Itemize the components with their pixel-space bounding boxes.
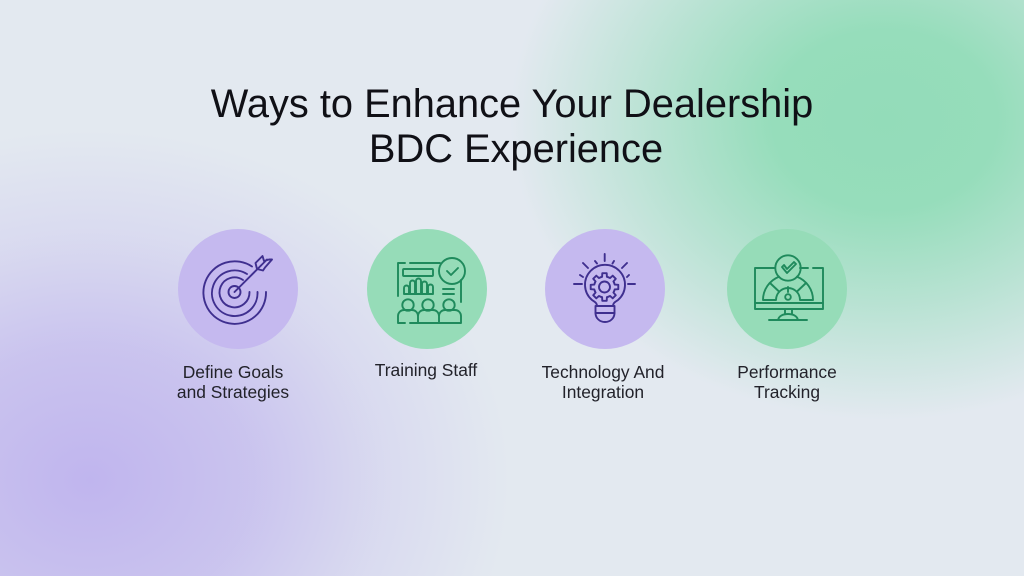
label: technology [542,362,664,402]
circle: performance [727,229,847,349]
circle: training [367,229,487,349]
icon: monitor with gauge [755,255,823,320]
title [210,82,813,171]
circle: technology [545,229,665,349]
icon: target with arrow [203,256,272,324]
icon: lightbulb with gear [574,254,635,322]
label: training: Training Staff [375,360,477,380]
circle: goals [178,229,298,349]
label: goals: Define Goals [183,362,283,382]
icon: training board [398,258,465,323]
label: performance: Tracking [754,382,820,402]
label: technology: Technology And [542,362,664,382]
title: Ways to Enhance Your Dealership [211,82,813,126]
gear teeth [591,273,618,301]
label: performance [737,362,837,402]
label: performance: Performance [737,362,837,382]
label: technology: Integration [562,382,644,402]
label: goals [177,362,289,402]
label: goals: and Strategies [177,382,289,402]
title: BDC Experience [369,127,663,171]
